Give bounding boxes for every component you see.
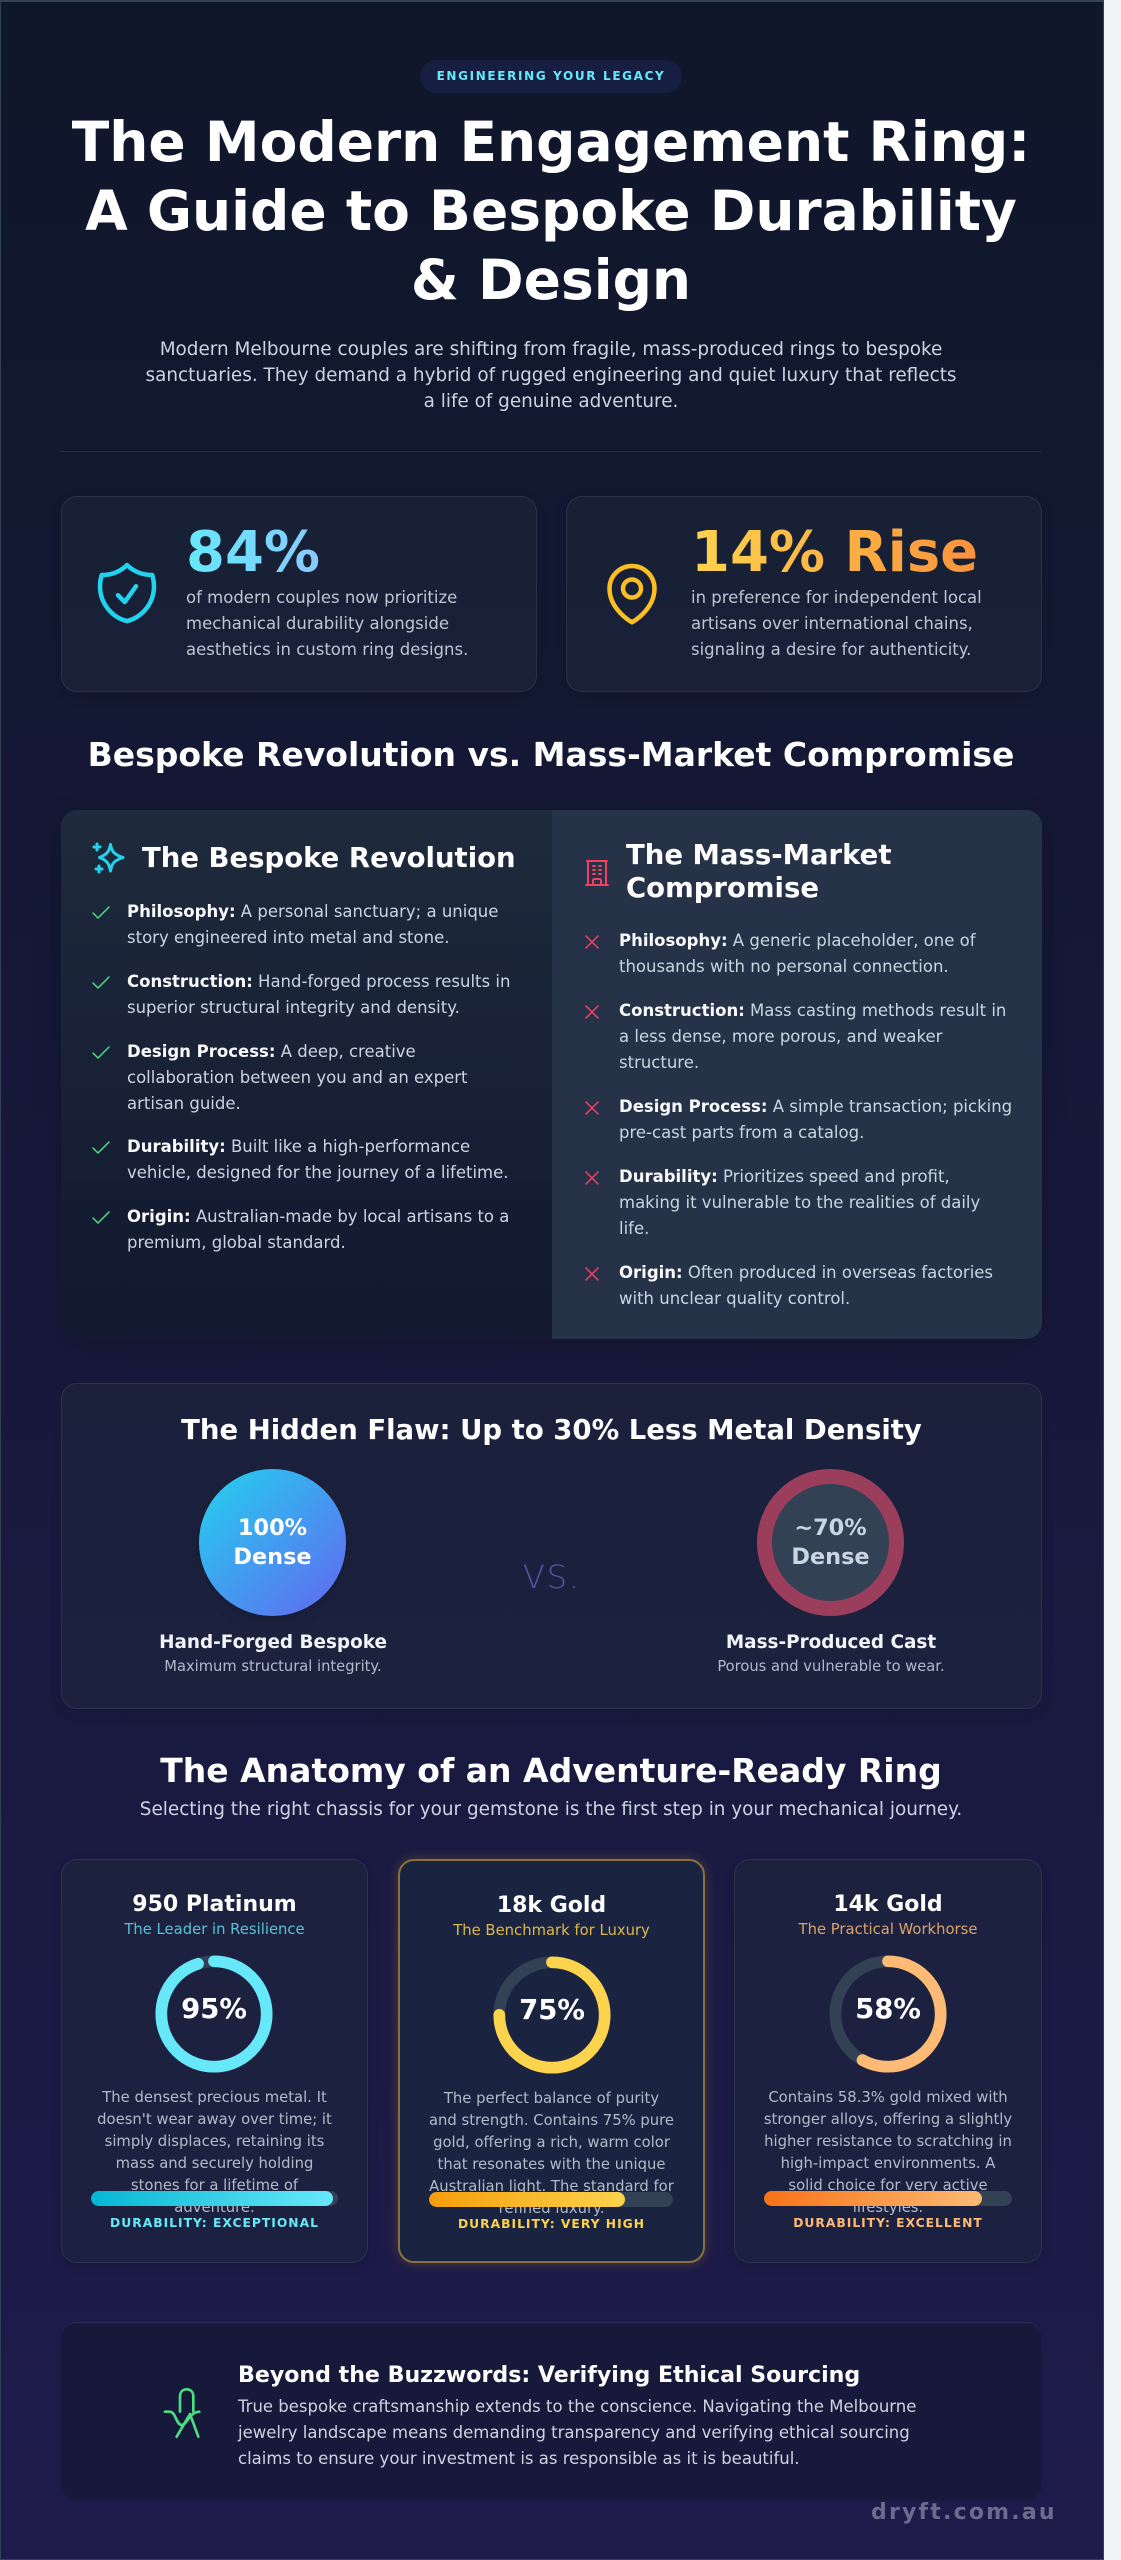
item: origin: Origin: Australian-made by local artisans to a (127, 1207, 509, 1226)
stat description: mechanical durability alongside (186, 614, 449, 633)
gauge value: 58% (855, 1993, 921, 2025)
panel heading: The Hidden Flaw: Up to 30% Less Metal Density (181, 1414, 922, 1446)
item: design process: collaboration between you and an expert (127, 1068, 468, 1087)
circle: 100% dense (199, 1469, 346, 1616)
metal tagline: The Practical Workhorse (799, 1921, 977, 1938)
metal name: 14k Gold (833, 1892, 943, 1917)
item: construction: Construction: Mass casting methods result in (619, 1001, 1006, 1020)
item: philosophy (619, 931, 976, 976)
item: durability: making it vulnerable to the realities of daily (619, 1193, 980, 1212)
check icon (92, 1046, 110, 1059)
heading: anatomy: The Anatomy of an Adventure-Ready Ring (160, 1751, 942, 1790)
description: and strength. Contains 75% pure (429, 2112, 674, 2129)
icon: shield check (98, 562, 156, 624)
durability bar (764, 2191, 1012, 2206)
caption note: Porous and vulnerable to wear. (717, 1658, 945, 1675)
item: construction: superior structural integrity and density. (127, 998, 460, 1017)
vs label: VS. (523, 1558, 581, 1596)
panel: 950 platinum (61, 1859, 368, 2263)
watermark: dryft.com.au (871, 2500, 1057, 2525)
column: the mass-market compromise (552, 810, 1042, 1339)
circle: 100% dense: Dense (233, 1544, 312, 1570)
body text: claims to ensure your investment is as responsible as it is beautiful. (238, 2449, 800, 2468)
item: design process: pre-cast parts from a catalog. (619, 1123, 864, 1142)
header pill: engineering your legacy (420, 60, 682, 93)
column: the bespoke revolution (61, 810, 552, 1339)
caption: mass-produced cast (717, 1632, 945, 1675)
icon: hand with sprout (164, 2388, 201, 2438)
stat number 84%: 84% (186, 520, 320, 585)
subtitle: sanctuaries. They demand a hybrid of rugged engineering and quiet luxury that reflects (146, 365, 956, 386)
panel: 14k gold (734, 1859, 1042, 2263)
item: construction: a less dense, more porous, and weaker (619, 1027, 942, 1046)
description: The densest precious metal. It (102, 2089, 327, 2106)
item: design process: artisan guide. (127, 1094, 241, 1113)
x icon (585, 1171, 599, 1185)
column heading: The Bespoke Revolution (142, 842, 516, 874)
list: mass-market attributes (585, 931, 1012, 1308)
description: solid choice for very active (788, 2177, 988, 2194)
gauge value: 95% (181, 1993, 247, 2025)
ring gauge 95% (155, 1956, 273, 2072)
caption title: Hand-Forged Bespoke (159, 1632, 387, 1653)
item: durability: vehicle, designed for the journey of a lifetime. (127, 1163, 509, 1182)
item: durability: Durability: Built like a high-performance (127, 1137, 470, 1156)
description: Australian light. The standard for (429, 2178, 674, 2195)
item: philosophy: Philosophy: A personal sanctuary; a unique (127, 902, 498, 921)
circle: ~70% dense (757, 1469, 904, 1616)
x icon (585, 935, 599, 949)
description: high-impact environments. A (781, 2155, 995, 2172)
description: gold, offering a rich, warm color (433, 2134, 670, 2151)
check icon (92, 976, 110, 989)
title: & Design (411, 248, 691, 312)
icon: sparkles (92, 842, 124, 874)
item: design process (619, 1097, 1012, 1142)
stat description: signaling a desire for authenticity. (691, 640, 971, 659)
item: construction: Construction: Hand-forged process results in (127, 972, 510, 991)
icon: building (585, 860, 609, 886)
durability bar (91, 2191, 338, 2206)
bar fill (764, 2191, 982, 2206)
subheading: anatomy: Selecting the right chassis for your gemstone is the first step in your mechanical journey. (140, 1799, 962, 1820)
description: simply displaces, retaining its (105, 2133, 324, 2150)
body text: jewelry landscape means demanding transparency and verifying ethical sourcing (238, 2423, 910, 2442)
ring gauge 75% (493, 1956, 611, 2074)
bar fill (429, 2192, 625, 2207)
panel: metal density comparison (61, 1383, 1042, 1709)
description: lifestyles. (853, 2199, 923, 2216)
metal name: 950 Platinum (132, 1892, 297, 1917)
bar fill (91, 2191, 333, 2206)
list: bespoke attributes (92, 902, 510, 1252)
icon: map pin (607, 564, 657, 624)
panel: ethical sourcing (61, 2322, 1042, 2500)
item: durability: life. (619, 1219, 649, 1238)
gauge value: 75% (519, 1994, 585, 2026)
item: durability: Durability: Prioritizes speed and profit, (619, 1167, 950, 1186)
description: adventure. (174, 2199, 255, 2216)
item: design process (127, 1042, 468, 1113)
item: construction: structure. (619, 1053, 699, 1072)
item: origin: Origin: Often produced in overseas factories (619, 1263, 993, 1282)
description: stronger alloys, offering a slightly (764, 2111, 1012, 2128)
caption note: Maximum structural integrity. (164, 1658, 382, 1675)
panel: stat 84% (61, 496, 537, 692)
caption title: Mass-Produced Cast (726, 1632, 936, 1653)
body text: True bespoke craftsmanship extends to the conscience. Navigating the Melbourne (238, 2397, 916, 2416)
check icon (92, 906, 110, 919)
description (429, 2090, 674, 2217)
metal tagline: The Leader in Resilience (124, 1921, 305, 1938)
item: design process: Design Process: A simple transaction; picking (619, 1097, 1012, 1116)
x icon (585, 1101, 599, 1115)
stat description: of modern couples now prioritize (186, 588, 457, 607)
description: doesn't wear away over time; it (97, 2111, 332, 2128)
caption: hand-forged bespoke (159, 1632, 387, 1675)
subtitle: Modern Melbourne couples are shifting from fragile, mass-produced rings to bespoke (160, 339, 942, 360)
item: design process: Design Process: A deep, creative (127, 1042, 416, 1061)
item: durability (127, 1137, 509, 1182)
description: stones for a lifetime of (131, 2177, 298, 2194)
item: durability (619, 1167, 980, 1238)
item: origin: with unclear quality control. (619, 1289, 850, 1308)
subtitle: a life of genuine adventure. (424, 391, 678, 412)
item: construction (127, 972, 510, 1017)
stat description: aesthetics in custom ring designs. (186, 640, 468, 659)
title: The Modern Engagement Ring: (72, 110, 1030, 174)
stat description (186, 588, 468, 659)
description (97, 2089, 332, 2216)
x icon (585, 1267, 599, 1281)
body text (238, 2394, 916, 2472)
subtitle (146, 339, 956, 412)
item: philosophy: Philosophy: A generic placeholder, one of (619, 931, 976, 950)
durability label: DURABILITY: EXCELLENT (793, 2216, 983, 2230)
check icon (92, 1211, 110, 1224)
description: refined luxury. (499, 2200, 604, 2217)
item: philosophy: story engineered into metal and stone. (127, 928, 449, 947)
description: mass and securely holding (116, 2155, 313, 2172)
item: philosophy: thousands with no personal connection. (619, 957, 949, 976)
description: The perfect balance of purity (444, 2090, 659, 2107)
heading: comparison: Bespoke Revolution vs. Mass-Market Compromise (88, 735, 1014, 774)
description: higher resistance to scratching in (764, 2133, 1012, 2150)
item: origin (127, 1207, 509, 1252)
column heading: Compromise (626, 872, 819, 904)
panel: comparison table (61, 810, 1042, 1339)
description (764, 2089, 1012, 2216)
stat description: in preference for independent local (691, 588, 982, 607)
item: construction (619, 1001, 1006, 1072)
durability bar (429, 2192, 673, 2207)
title (72, 110, 1030, 312)
item: origin: premium, global standard. (127, 1233, 346, 1252)
item: origin (619, 1263, 993, 1308)
metal tagline: The Benchmark for Luxury (453, 1922, 650, 1939)
durability label: DURABILITY: VERY HIGH (458, 2217, 645, 2231)
description: Contains 58.3% gold mixed with (768, 2089, 1008, 2106)
title: A Guide to Bespoke Durability (85, 179, 1017, 243)
metal name: 18k Gold (497, 1893, 606, 1918)
ring gauge 58% (830, 1956, 947, 2072)
check icon (92, 1141, 110, 1154)
durability label: DURABILITY: EXCEPTIONAL (110, 2216, 319, 2230)
stat description (691, 588, 982, 659)
stat number 14% rise: 14% Rise (691, 520, 978, 585)
item: philosophy (127, 902, 498, 947)
column heading: The Mass-Market (626, 839, 891, 871)
column heading (626, 839, 891, 904)
panel: 18k gold (398, 1859, 705, 2263)
circle: 100% dense: 100% (238, 1515, 307, 1541)
heading: Beyond the Buzzwords: Verifying Ethical Sourcing (238, 2362, 860, 2388)
panel: stat 14% rise (566, 496, 1042, 692)
description: that resonates with the unique (438, 2156, 665, 2173)
header pill: engineering your legacy: ENGINEERING YOUR LEGACY (437, 69, 665, 83)
stat description: artisans over international chains, (691, 614, 973, 633)
x icon (585, 1005, 599, 1019)
circle: ~70% dense: ~70% (794, 1515, 867, 1541)
circle: ~70% dense: Dense (791, 1544, 870, 1570)
